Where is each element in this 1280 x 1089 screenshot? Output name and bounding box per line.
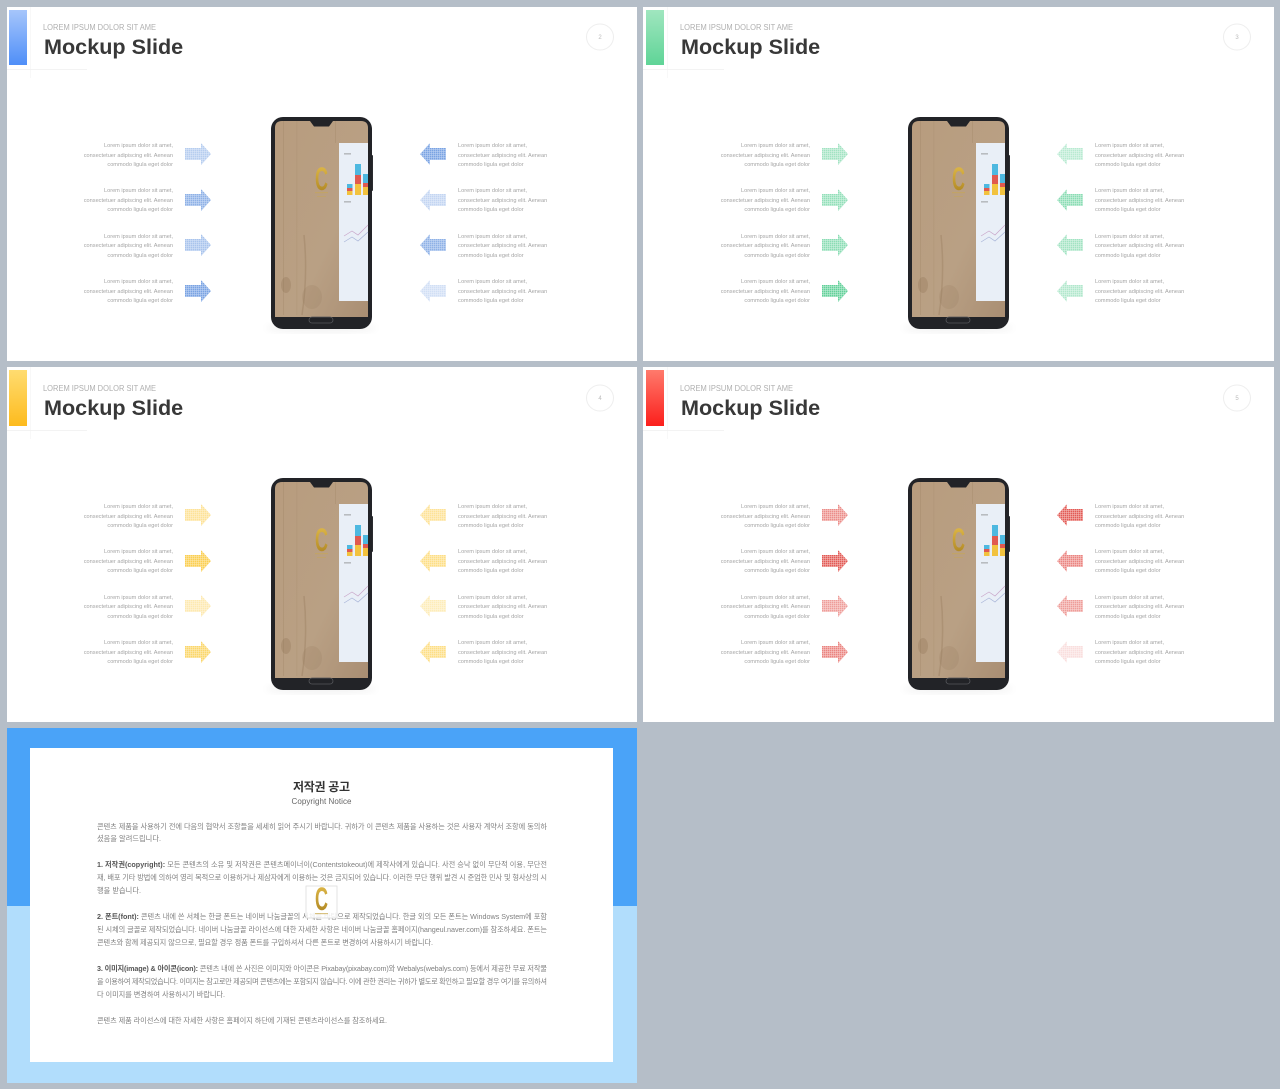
left text 4: consectetuer adipiscing elit. Aenean bbox=[84, 289, 173, 295]
notice title: 저작권 공고 bbox=[293, 779, 350, 794]
left text 4: Lorem ipsum dolor sit amet, bbox=[104, 279, 173, 285]
left text 2: Lorem ipsum dolor sit amet, bbox=[741, 549, 810, 555]
panel: yellow mockup slide bbox=[7, 367, 637, 722]
right text 4: commodo ligula eget dolor bbox=[1095, 659, 1161, 665]
left text 1: commodo ligula eget dolor bbox=[744, 523, 810, 529]
logo stamp bbox=[306, 881, 337, 918]
page number: 3 bbox=[1235, 35, 1239, 41]
title: Mockup Slide bbox=[681, 34, 820, 59]
left text 3: commodo ligula eget dolor bbox=[107, 614, 173, 620]
left text 2: commodo ligula eget dolor bbox=[744, 207, 810, 213]
logo stamp: C bbox=[315, 881, 328, 917]
left text 4: commodo ligula eget dolor bbox=[107, 659, 173, 665]
right text 2: consectetuer adipiscing elit. Aenean bbox=[458, 559, 547, 565]
section 3: image and icon: 다 이미지를 변경하여 사용하시기 바랍니다. bbox=[97, 990, 225, 999]
section 1: copyright: 행을 받습니다. bbox=[97, 886, 141, 895]
phone mockup bbox=[265, 478, 377, 693]
left text 3: Lorem ipsum dolor sit amet, bbox=[104, 234, 173, 240]
panel: copyright notice slide bbox=[7, 728, 637, 1083]
intro text bbox=[97, 822, 547, 843]
left text 2: consectetuer adipiscing elit. Aenean bbox=[721, 559, 810, 565]
right text 1: commodo ligula eget dolor bbox=[1095, 523, 1161, 529]
phone mockup bbox=[265, 117, 377, 332]
right text 3: consectetuer adipiscing elit. Aenean bbox=[1095, 243, 1184, 249]
left text 1: commodo ligula eget dolor bbox=[744, 162, 810, 168]
left text 1: Lorem ipsum dolor sit amet, bbox=[741, 143, 810, 149]
section 1: copyright: 1. 저작권(copyright): 모든 콘텐츠의 소유 및 저작권은 콘텐츠메이너이(Contentstokeout)에 제작사에게 있습니다. 사전 승낙 없이 무단적 이용, 무단전 bbox=[97, 860, 547, 869]
title: Mockup Slide bbox=[44, 395, 183, 420]
right text 4: commodo ligula eget dolor bbox=[1095, 298, 1161, 304]
page number: 5 bbox=[1235, 396, 1239, 402]
icon: arrows pointing right bbox=[822, 143, 848, 302]
section 3: image and icon bbox=[97, 964, 547, 999]
section 3: image and icon: 을 이용하여 제작되었습니다. 이미지는 참고로만 제공되며 콘텐츠에는 포함되지 않습니다. 이에 관한 권리는 귀하가 별도로 확인하고 필요할 경우 여기를 유의하셔 bbox=[97, 977, 547, 986]
right text 2: Lorem ipsum dolor sit amet, bbox=[458, 549, 527, 555]
panel: red mockup slide bbox=[643, 367, 1274, 722]
left text 4: Lorem ipsum dolor sit amet, bbox=[741, 279, 810, 285]
left text 4: consectetuer adipiscing elit. Aenean bbox=[721, 289, 810, 295]
right text 2: commodo ligula eget dolor bbox=[1095, 568, 1161, 574]
icon: arrows pointing right bbox=[185, 504, 211, 663]
right text 4: Lorem ipsum dolor sit amet, bbox=[458, 640, 527, 646]
panel: blue mockup slide bbox=[7, 7, 637, 361]
right text 4: Lorem ipsum dolor sit amet, bbox=[1095, 640, 1164, 646]
left text 1: consectetuer adipiscing elit. Aenean bbox=[721, 153, 810, 159]
left text 3: commodo ligula eget dolor bbox=[744, 253, 810, 259]
right text 3: commodo ligula eget dolor bbox=[458, 253, 524, 259]
left text 3: commodo ligula eget dolor bbox=[107, 253, 173, 259]
left text 3: Lorem ipsum dolor sit amet, bbox=[104, 595, 173, 601]
right text 1: Lorem ipsum dolor sit amet, bbox=[1095, 143, 1164, 149]
section 1: copyright bbox=[97, 860, 547, 895]
right text 3: consectetuer adipiscing elit. Aenean bbox=[458, 604, 547, 610]
right text 2: commodo ligula eget dolor bbox=[458, 207, 524, 213]
right text 4: consectetuer adipiscing elit. Aenean bbox=[458, 289, 547, 295]
section 3: image and icon: 3. 이미지(image) & 아이콘(icon): 콘텐츠 내에 쓴 사진은 이미지와 아이콘은 Pixabay(pixabay.com)와 Webalys(webalys.com) 등에서 제공한 무료 저작물 bbox=[97, 964, 547, 973]
page number bbox=[1224, 24, 1250, 50]
left text 3: consectetuer adipiscing elit. Aenean bbox=[721, 243, 810, 249]
left text 1: consectetuer adipiscing elit. Aenean bbox=[84, 153, 173, 159]
left text 2: commodo ligula eget dolor bbox=[744, 568, 810, 574]
section 2: font bbox=[97, 912, 547, 947]
left text 4: commodo ligula eget dolor bbox=[744, 659, 810, 665]
page number: 2 bbox=[598, 35, 602, 41]
subtitle: LOREM IPSUM DOLOR SIT AME bbox=[680, 384, 793, 393]
left text 4: commodo ligula eget dolor bbox=[744, 298, 810, 304]
phone mockup bbox=[902, 117, 1014, 332]
accent bar bbox=[9, 10, 27, 65]
right text 3: Lorem ipsum dolor sit amet, bbox=[458, 234, 527, 240]
right text 1: Lorem ipsum dolor sit amet, bbox=[1095, 504, 1164, 510]
right text 3: commodo ligula eget dolor bbox=[458, 614, 524, 620]
right text 4: consectetuer adipiscing elit. Aenean bbox=[458, 650, 547, 656]
right text 3: Lorem ipsum dolor sit amet, bbox=[458, 595, 527, 601]
left text 2: Lorem ipsum dolor sit amet, bbox=[741, 188, 810, 194]
page number bbox=[1224, 385, 1250, 411]
left text 1: consectetuer adipiscing elit. Aenean bbox=[84, 514, 173, 520]
right text 2: Lorem ipsum dolor sit amet, bbox=[1095, 549, 1164, 555]
section 1: copyright: 재, 배포 기타 방법에 의하여 영리 목적으로 이용하거나 제삼자에게 이용하는 것은 금지되어 있습니다. 이러한 무단 행위 발견 시 준엄한 민사 및 형사상의 시 bbox=[97, 873, 547, 882]
left text 4: Lorem ipsum dolor sit amet, bbox=[104, 640, 173, 646]
left text 2: commodo ligula eget dolor bbox=[107, 568, 173, 574]
right text 4: commodo ligula eget dolor bbox=[458, 298, 524, 304]
page number bbox=[586, 24, 614, 50]
right text 3: Lorem ipsum dolor sit amet, bbox=[1095, 234, 1164, 240]
title: Mockup Slide bbox=[681, 395, 820, 420]
right text 4: Lorem ipsum dolor sit amet, bbox=[458, 279, 527, 285]
right text 4: Lorem ipsum dolor sit amet, bbox=[1095, 279, 1164, 285]
section 2: font: 콘텐츠와 함께 제공되지 않으므로, 필요할 경우 정품 폰트를 구입하셔서 다른 폰트로 변경하여 사용하시기 바랍니다. bbox=[97, 938, 433, 947]
left text 4: consectetuer adipiscing elit. Aenean bbox=[84, 650, 173, 656]
subtitle: LOREM IPSUM DOLOR SIT AME bbox=[680, 23, 793, 32]
section 2: font: 2. 폰트(font): 콘텐츠 내에 쓴 서체는 한글 폰트는 네이버 나눔글꼴의 서체를 바탕으로 제작되었습니다. 한글 외의 모든 폰트는 Windows System에 포함 bbox=[97, 912, 547, 921]
left text 4: consectetuer adipiscing elit. Aenean bbox=[721, 650, 810, 656]
notice subtitle: Copyright Notice bbox=[292, 797, 352, 806]
right text 3: consectetuer adipiscing elit. Aenean bbox=[1095, 604, 1184, 610]
left text 2: consectetuer adipiscing elit. Aenean bbox=[721, 198, 810, 204]
accent bar bbox=[9, 370, 27, 426]
left text 1: Lorem ipsum dolor sit amet, bbox=[104, 143, 173, 149]
right text 4: consectetuer adipiscing elit. Aenean bbox=[1095, 650, 1184, 656]
left text 2: commodo ligula eget dolor bbox=[107, 207, 173, 213]
right text 2: Lorem ipsum dolor sit amet, bbox=[1095, 188, 1164, 194]
left text 1: commodo ligula eget dolor bbox=[107, 162, 173, 168]
page number: 4 bbox=[598, 396, 602, 402]
icon: arrows pointing right bbox=[185, 143, 211, 302]
right text 2: Lorem ipsum dolor sit amet, bbox=[458, 188, 527, 194]
left text 1: consectetuer adipiscing elit. Aenean bbox=[721, 514, 810, 520]
page number bbox=[586, 385, 614, 411]
left text 1: commodo ligula eget dolor bbox=[107, 523, 173, 529]
left text 1: Lorem ipsum dolor sit amet, bbox=[741, 504, 810, 510]
right text 1: consectetuer adipiscing elit. Aenean bbox=[458, 153, 547, 159]
intro text: 콘텐츠 제품을 사용하기 전에 다음의 협약서 조항들을 세세히 읽어 주시기 바랍니다. 귀하가 이 콘텐츠 제품을 사용하는 것은 사용자 계약서 조항에 동의하 bbox=[97, 822, 547, 831]
icon: arrows pointing left bbox=[420, 504, 446, 663]
left text 4: Lorem ipsum dolor sit amet, bbox=[741, 640, 810, 646]
left text 3: commodo ligula eget dolor bbox=[744, 614, 810, 620]
right text 1: commodo ligula eget dolor bbox=[458, 523, 524, 529]
left text 2: consectetuer adipiscing elit. Aenean bbox=[84, 559, 173, 565]
left text 1: Lorem ipsum dolor sit amet, bbox=[104, 504, 173, 510]
right text 2: consectetuer adipiscing elit. Aenean bbox=[1095, 559, 1184, 565]
subtitle: LOREM IPSUM DOLOR SIT AME bbox=[43, 23, 156, 32]
right text 3: Lorem ipsum dolor sit amet, bbox=[1095, 595, 1164, 601]
right text 2: commodo ligula eget dolor bbox=[1095, 207, 1161, 213]
left text 3: consectetuer adipiscing elit. Aenean bbox=[84, 243, 173, 249]
right text 4: commodo ligula eget dolor bbox=[458, 659, 524, 665]
right text 3: commodo ligula eget dolor bbox=[1095, 614, 1161, 620]
phone mockup bbox=[902, 478, 1014, 693]
right text 1: consectetuer adipiscing elit. Aenean bbox=[1095, 514, 1184, 520]
left text 3: Lorem ipsum dolor sit amet, bbox=[741, 595, 810, 601]
icon: arrows pointing left bbox=[1057, 143, 1083, 302]
section 2: font: 된 시체의 글꼴로 제작되었습니다. 네이버 나눔글꼴 라이선스에 대한 자세한 사항은 네이버 나눔글꼴 홈페이지(hangeul.naver.com)를 참조하세요. 폰트는 bbox=[97, 925, 547, 934]
left text 2: Lorem ipsum dolor sit amet, bbox=[104, 188, 173, 194]
right text 3: commodo ligula eget dolor bbox=[1095, 253, 1161, 259]
left text 3: consectetuer adipiscing elit. Aenean bbox=[721, 604, 810, 610]
icon: arrows pointing right bbox=[822, 504, 848, 663]
right text 1: commodo ligula eget dolor bbox=[1095, 162, 1161, 168]
closing text: 콘텐츠 제품 라이선스에 대한 자세한 사항은 홈페이지 하단에 기재된 콘텐츠라이선스를 참조하세요. bbox=[97, 1016, 387, 1025]
left text 3: Lorem ipsum dolor sit amet, bbox=[741, 234, 810, 240]
intro text: 셨음을 알려드립니다. bbox=[97, 834, 161, 843]
subtitle: LOREM IPSUM DOLOR SIT AME bbox=[43, 384, 156, 393]
left text 2: Lorem ipsum dolor sit amet, bbox=[104, 549, 173, 555]
right text 1: Lorem ipsum dolor sit amet, bbox=[458, 143, 527, 149]
right text 1: consectetuer adipiscing elit. Aenean bbox=[1095, 153, 1184, 159]
right text 1: commodo ligula eget dolor bbox=[458, 162, 524, 168]
accent bar bbox=[646, 370, 664, 426]
panel: green mockup slide bbox=[643, 7, 1274, 361]
right text 4: consectetuer adipiscing elit. Aenean bbox=[1095, 289, 1184, 295]
icon: arrows pointing left bbox=[420, 143, 446, 302]
right text 3: consectetuer adipiscing elit. Aenean bbox=[458, 243, 547, 249]
right text 2: commodo ligula eget dolor bbox=[458, 568, 524, 574]
icon: arrows pointing left bbox=[1057, 504, 1083, 663]
right text 1: consectetuer adipiscing elit. Aenean bbox=[458, 514, 547, 520]
left text 3: consectetuer adipiscing elit. Aenean bbox=[84, 604, 173, 610]
left text 2: consectetuer adipiscing elit. Aenean bbox=[84, 198, 173, 204]
right text 2: consectetuer adipiscing elit. Aenean bbox=[1095, 198, 1184, 204]
right text 2: consectetuer adipiscing elit. Aenean bbox=[458, 198, 547, 204]
right text 1: Lorem ipsum dolor sit amet, bbox=[458, 504, 527, 510]
accent bar bbox=[646, 10, 664, 65]
title: Mockup Slide bbox=[44, 34, 183, 59]
left text 4: commodo ligula eget dolor bbox=[107, 298, 173, 304]
